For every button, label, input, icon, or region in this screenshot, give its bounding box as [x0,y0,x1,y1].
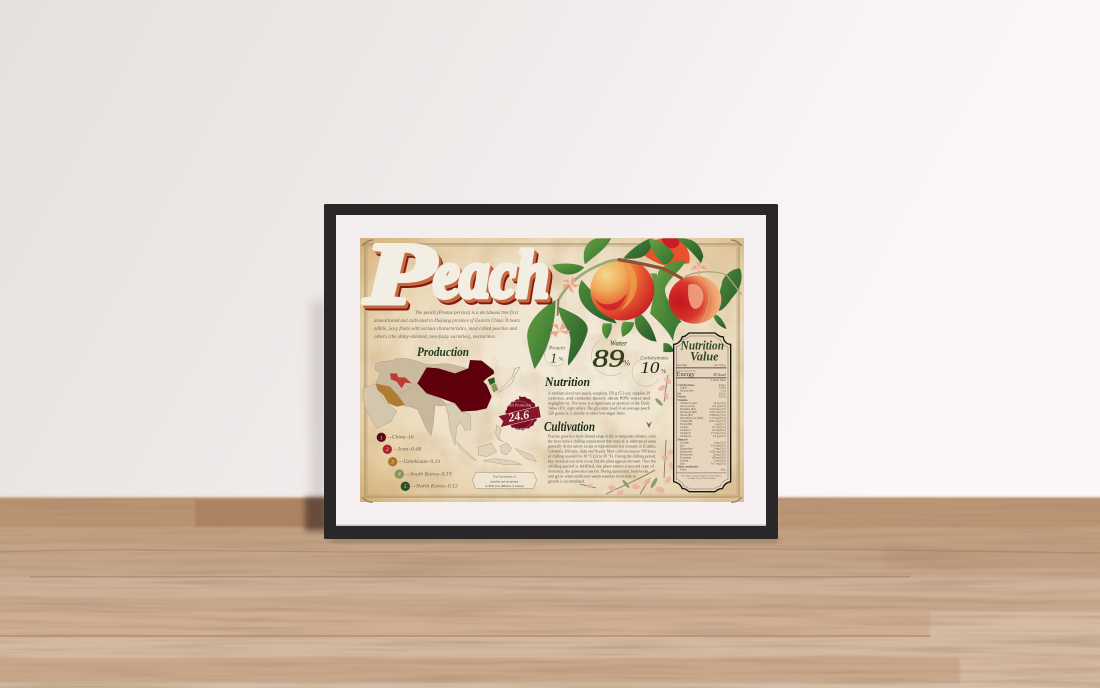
nutrition table: 4 µg (1%) [715,423,726,426]
legend: South Korea: 4 [398,473,401,478]
macro stat: Carbohydrates: Carbohydrates [640,356,668,361]
nutrition table: 0.031 mg (3%) [710,411,726,414]
legend: Uzbekistan: 3 [391,460,394,465]
country: Iran [376,383,405,407]
land: Arabian Peninsula [363,384,397,428]
nutrition table: 0 mg (0%) [714,460,726,463]
icon: blossoms on branch [550,261,708,338]
macro stat: Water: 89 [593,344,624,373]
nutrition table: 0.25 mg (2%) [711,445,726,448]
country: Uzbekistan [390,373,412,388]
nutrition text: calories, and contains mostly about 89% water and [548,396,650,402]
nutrition table: 0.025 mg (2%) [710,420,726,423]
macro stat: Carbohydrates [632,356,668,386]
title: Peach: P [363,225,436,323]
nutrition table: Percentages estimated using US recommendations [682,475,722,478]
land: Central and North Asia [375,358,470,397]
nutrition table: 0.25 g [719,392,726,395]
nutrition table: 0.153 mg (3%) [710,417,726,420]
note box [472,472,537,489]
nutrition table: Protein [677,396,686,399]
intro text: The peach (Prunus persica) is a deciduous tree first [415,309,518,316]
heading: Cultivation: Cultivation [544,419,595,434]
nutrition table: 6 mg (1%) [714,442,726,445]
nutrition table: Energy [677,371,696,378]
ornamental border [362,240,742,502]
wall background [0,0,1100,499]
nutrition text: negligible fat. Not none is a significant proportion of the Daily [548,400,650,406]
note box: peaches and nectarines [491,479,519,483]
cultivation text: dormancy, the quiescence period. During quiescence, buds break [548,468,648,474]
macro stat: Water: % [623,358,630,368]
intro text: edible, juicy fruits with various characteristics, most called peaches and [374,325,517,332]
branch with peaches and leaves [527,238,742,369]
intro text: domesticated and cultivated in Zhejiang province of Eastern China. It bears [374,317,520,324]
cultivation text: and grow when sufficient warm weather favorable to [548,474,636,478]
nutrition table: Vitamin C [680,429,691,432]
nutrition table: Vitamin K [680,435,691,438]
nutrition table [676,363,726,480]
nutrition table: 0.73 mg (5%) [711,432,726,435]
nutrition table: 9.54 g [719,384,726,387]
legend: Uzbekistan [388,457,441,466]
nutrition table: Sugars [680,387,687,390]
country: China [417,360,494,412]
macro stat: Water: Water [610,340,627,348]
nutrition table: Serving [677,363,687,367]
nutrition text [548,390,650,416]
icon: right peach [669,276,721,324]
nutrition table: 8.39 g [719,387,726,390]
nutrition table: Minerals [677,438,688,441]
icon: leaves behind peaches [579,238,742,352]
macro stat: Protein [545,345,565,366]
cultivation text [548,434,656,484]
nutrition table: Folate (B9) [680,423,692,426]
nutrition table: % Daily Value [710,379,726,382]
legend: China: 1 [380,436,383,441]
nutrition table: Vitamin A equiv. [680,402,698,405]
nutrition value panel: Nutrition [680,338,724,352]
title: Peach: each [433,236,549,312]
picture frame [324,204,778,539]
cultivation text: chilling period is fulfilled, the plant enters a second type of [548,464,655,470]
cultivation text: growth is accumulated. [548,478,585,484]
production badge: Total Production [507,403,531,407]
cultivation text: Peaches grow in a fairly limited range in dry or temperate climates, since [548,434,656,440]
nutrition text: Value (DV, right table). The glycemic load of an average peach [548,406,650,412]
cultivation text: key chemical reactions occur, but the plant appears dormant. Once the [548,458,656,464]
nutrition table: Niacin (B3) [680,414,693,417]
nutrition table: 0.91 g [719,396,726,399]
nutrition table: 1.5 g [720,389,726,392]
nutrition table: Other constituents [677,466,698,469]
nutrition table: Vitamin E [680,432,691,435]
title: Peach: P [367,230,440,328]
nutrition table: for adults. Source: USDA Database [688,477,716,480]
nutrition table: 20 mg (3%) [713,454,726,457]
legend: China: —China–16 [386,436,414,441]
nutrition table: 0.806 mg (5%) [710,414,726,417]
nutrition table: Iron [680,445,685,448]
land: Southeast Asia islands [457,425,537,464]
macro stat: Carbohydrates: 10 [640,358,659,377]
nutrition table: Manganese [680,451,693,454]
nutrition value panel [674,333,731,492]
macro stat: Protein: Protein [548,345,565,351]
nutrition table: Pantothenic acid (B5) [680,417,703,420]
production badge: Million tonnes [508,426,529,430]
intro text [374,309,520,340]
nutrition table: Phosphorus [680,454,692,457]
map of Asia [363,358,541,491]
nutrition table: Vitamin B6 [680,420,693,423]
legend: Iran [383,445,422,454]
land: Indochina [446,404,471,445]
macro stat: Protein: % [559,356,564,362]
legend: South Korea: —South Korea–0.19 [404,472,452,477]
nutrition table: Water [680,469,686,472]
nutrition table: 39 kcal [713,372,726,377]
nutrition table: 0.024 mg (2%) [710,408,726,411]
title: Peach: each [436,239,552,315]
nutrition table: Fat [677,392,681,395]
heading: Production: Production [417,345,469,359]
note box: in 2020 year (Million of tonnes) [485,484,524,488]
heading: Nutrition: Nutrition [544,374,590,389]
nutrition table: 9 mg (3%) [714,448,726,451]
title: Peach: P [365,228,439,326]
title: Peach [363,225,553,328]
icon: peach behind top [642,238,690,266]
icon: main peach [590,259,654,320]
nutrition table: Choline [680,426,689,429]
legend: South Korea [395,469,452,479]
nutrition table: 0.17 mg (2%) [711,463,726,466]
nutrition text: A medium-sized raw peach, weighing 150 g (5.3 oz), supplies 39 [548,390,650,396]
nutrition table: 6.6 mg (8%) [712,429,726,432]
production badge: 24.6 [506,407,530,425]
legend: Uzbekistan: —Uzbekistan–0.19 [397,460,441,465]
nutrition table: 162 µg (2%) [712,405,726,408]
cultivation text: of chilling around 0 to 10 °C (32 to 50 °F). During the chilling period, [548,454,656,460]
macro stat: Carbohydrates: % [661,369,666,375]
country: South Korea [491,383,498,392]
poster [360,225,744,502]
nutrition table: Magnesium [680,448,693,451]
nutrition table: Potassium [680,457,692,460]
cultivation text: the trees have a chilling requirement that tropical or subtropical areas [548,438,656,444]
cultivation text: generally do not satisfy except at high altitudes (for example in Ecuador, [548,444,656,450]
nutrition table: Calories per serving [677,369,696,372]
land: South Asia [398,383,447,436]
nutrition text: 120 grams is 3, similar to other low-sugar fruits. [548,410,626,416]
legend: North Korea: 5 [404,485,407,490]
frame shadow [305,300,778,542]
macro stat: Water [591,340,630,376]
title: Peach: each [437,241,553,317]
nutrition table: per 100 g [714,363,726,367]
land: Japan [498,367,520,393]
nutrition table: Vitamins [677,399,688,402]
nutrition table: Dietary fiber [680,389,694,392]
decorative blossoms [580,375,676,497]
nutrition table: Riboflavin (B2) [680,411,697,414]
parchment background [360,238,744,502]
icon: branch [558,260,742,315]
wooden floor [0,497,1100,688]
macro stat: Protein: 1 [550,351,557,366]
nutrition table: Sodium [680,460,689,463]
icon: front leaves [527,238,611,369]
nutrition table: Calcium [680,442,690,445]
legend: Iran: —Iran–0.68 [392,448,422,453]
legend: North Korea [401,482,458,491]
production badge [498,396,541,430]
label shape [674,333,731,492]
nutrition table: Carbohydrates [677,384,694,387]
legend: North Korea: —North Korea–0.12 [410,485,458,490]
nutrition table: Zinc [680,463,686,466]
cultivation text: Colombia, Ethiopia, India and Nepal). Most cultivars require 500 hours [548,448,656,454]
nutrition table: 6.1 mg (1%) [712,426,726,429]
country: North Korea [488,377,495,385]
note box: Top 5 producers of [493,475,516,479]
legend: Iran: 2 [386,448,389,453]
nutrition table: 2.6 µg (2%) [713,435,726,438]
intro text: others (the shiny-skinned, non-fuzzy varieties), nectarines. [374,333,496,340]
nutrition table: beta-Carotene [680,405,696,408]
nutrition table: Thiamine (B1) [680,408,696,411]
nutrition table: 89 g [721,469,726,472]
nutrition value panel: Value [690,349,719,363]
nutrition table: 0.061 mg (3%) [710,451,726,454]
nutrition table: 16 µg (2%) [714,402,726,405]
legend: China [377,433,414,442]
nutrition table: 190 mg (4%) [712,457,726,460]
